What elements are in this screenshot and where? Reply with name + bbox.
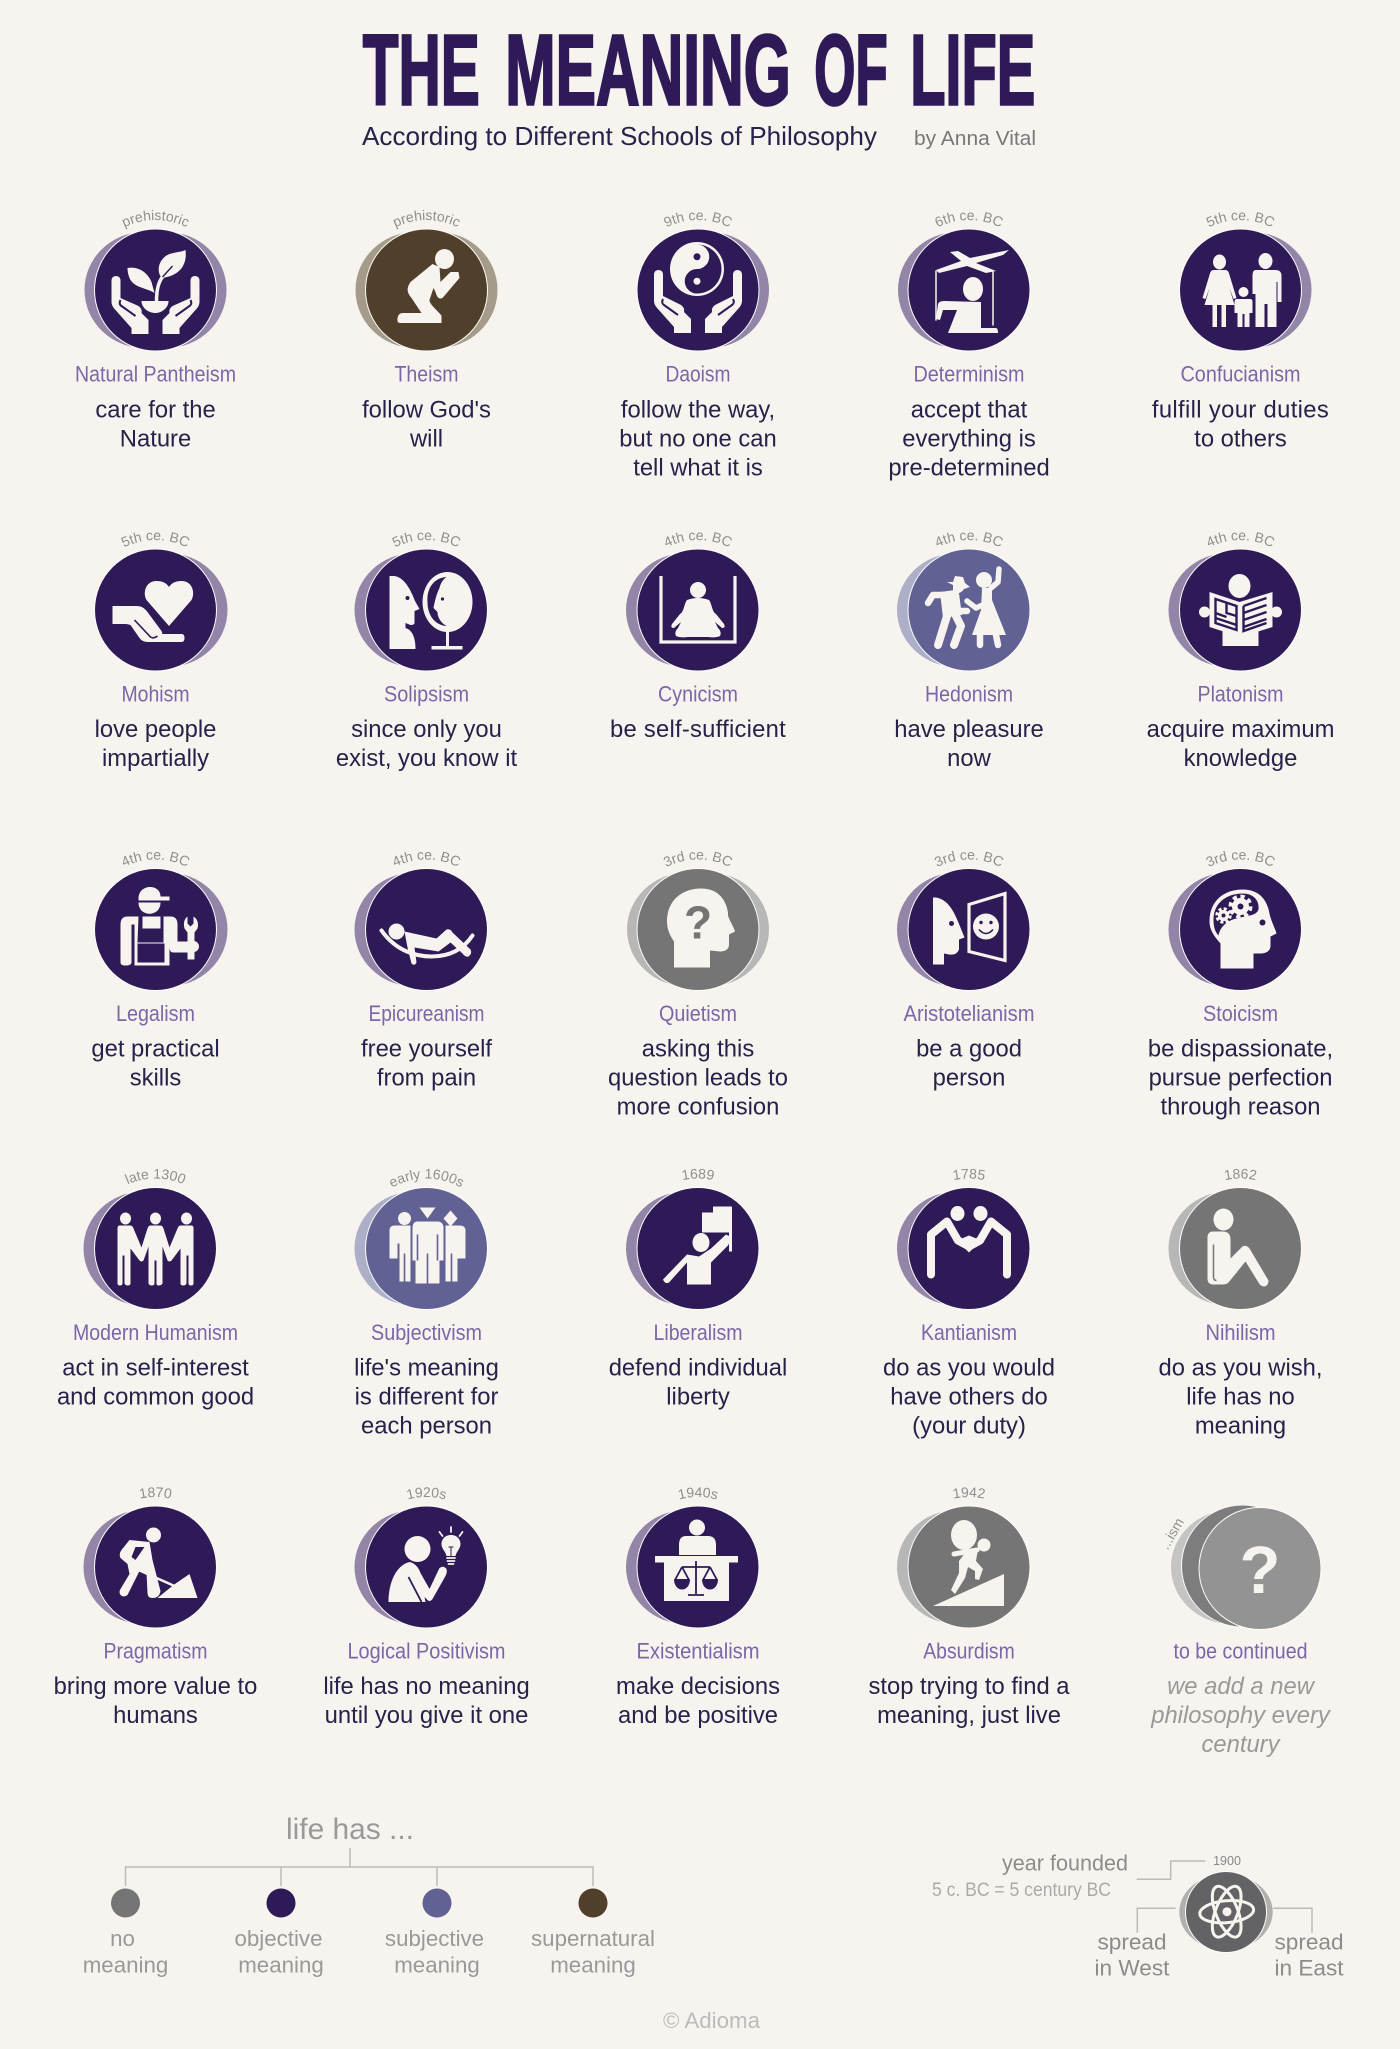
panel: Legalism xyxy=(91,852,228,1092)
title: THE xyxy=(363,14,480,126)
panel: Natural Pantheism xyxy=(75,210,236,452)
byline: by Anna Vital xyxy=(914,128,1036,150)
meaning: make decisions xyxy=(616,1673,780,1700)
legend item: no meaning: no xyxy=(110,1926,135,1951)
name: Theism xyxy=(394,362,458,387)
icon: person digging xyxy=(84,1506,217,1628)
icon: question mark stacked circles: ? xyxy=(1240,1533,1280,1608)
meaning: accept that xyxy=(911,396,1028,424)
legend item: supernatural meaning: supernatural xyxy=(531,1926,655,1951)
meaning: be a good xyxy=(916,1036,1022,1062)
meaning: have others do xyxy=(890,1384,1048,1410)
key connectors xyxy=(1137,1861,1312,1933)
panel: Quietism xyxy=(608,850,788,1120)
meaning: century xyxy=(1201,1731,1282,1758)
era: 4th ce. BC: 4th ce. BC xyxy=(936,532,1003,546)
icon: puppet on strings xyxy=(898,228,1030,352)
meaning: get practical xyxy=(91,1036,220,1062)
key: spread in East: in East xyxy=(1274,1955,1344,1980)
icon: person in hammock xyxy=(354,868,488,991)
name: Cynicism xyxy=(658,682,738,707)
name: Kantianism xyxy=(921,1320,1017,1345)
meaning: bring more value to xyxy=(54,1673,257,1700)
panel: Solipsism xyxy=(336,532,517,772)
era: 1940s: 1940s xyxy=(678,1487,718,1500)
meaning: be dispassionate, xyxy=(1148,1036,1333,1062)
meaning: meaning xyxy=(1195,1412,1286,1440)
meaning: care for the xyxy=(95,396,216,424)
key: year sample: 1900 xyxy=(1213,1854,1241,1868)
icon: hands holding yin yang xyxy=(636,228,769,352)
key: year founded: year founded xyxy=(1002,1851,1128,1876)
panel: Logical Positivism xyxy=(323,1487,530,1729)
legend item: objective meaning xyxy=(234,1888,324,1978)
era: late 1300: late 1300 xyxy=(124,1169,186,1184)
legend tree connector xyxy=(126,1848,593,1886)
meaning: but no one can xyxy=(619,426,777,452)
meaning: love people xyxy=(95,716,216,743)
meaning: pursue perfection xyxy=(1149,1064,1332,1092)
title: OF xyxy=(814,14,888,126)
name: Daoism xyxy=(666,362,730,387)
panel: Mohism xyxy=(94,532,228,772)
icon: head with question mark xyxy=(627,868,769,991)
meaning: now xyxy=(947,745,992,772)
meaning: do as you wish, xyxy=(1158,1354,1323,1382)
era: 6th ce. BC: 6th ce. BC xyxy=(936,212,1003,226)
icon: three people holding hands xyxy=(84,1187,217,1310)
meaning: be self-sufficient xyxy=(610,716,786,743)
era: prehistoric: prehistoric xyxy=(393,210,460,230)
meaning: have pleasure xyxy=(894,716,1044,743)
name: Epicureanism xyxy=(368,1001,484,1026)
era: 5th ce. BC: 5th ce. BC xyxy=(392,532,460,546)
legend item: objective meaning: meaning xyxy=(238,1952,324,1978)
icon: judge at desk with scales xyxy=(626,1506,760,1628)
meaning: free yourself xyxy=(361,1036,492,1062)
era: 3rd ce. BC: 3rd ce. BC xyxy=(664,850,732,866)
panel: Determinism xyxy=(888,212,1050,482)
panel: Daoism xyxy=(619,212,777,482)
legend item: supernatural meaning xyxy=(531,1888,655,1978)
panel: Hedonism xyxy=(894,532,1044,772)
icon: question mark stacked circles xyxy=(1171,1505,1322,1630)
icon: kneeling prayer xyxy=(356,228,498,352)
panel: Modern Humanism xyxy=(57,1169,254,1410)
meaning: we add a new xyxy=(1167,1673,1316,1700)
name: Pragmatism xyxy=(104,1639,208,1664)
name: Quietism xyxy=(659,1001,737,1026)
panel: Theism xyxy=(356,210,498,452)
panel: Subjectivism xyxy=(354,1168,499,1440)
era: 1785: 1785 xyxy=(954,1168,985,1180)
panel: Platonism xyxy=(1147,532,1334,772)
era: early 1600s: early 1600s xyxy=(390,1168,464,1187)
legend item: no meaning: meaning xyxy=(83,1952,168,1978)
meaning: do as you would xyxy=(883,1354,1055,1382)
meaning: fulfill your duties xyxy=(1152,396,1329,424)
meaning: follow the way, xyxy=(621,396,775,424)
meaning: everything is xyxy=(902,426,1036,452)
meaning: stop trying to find a xyxy=(868,1673,1070,1700)
era: 1942: 1942 xyxy=(954,1487,985,1498)
meaning: Nature xyxy=(120,426,191,452)
meaning: since only you xyxy=(351,716,502,743)
subtitle: According to Different Schools of Philosophy xyxy=(362,121,877,151)
panel: Cynicism xyxy=(610,532,786,743)
panel: Absurdism xyxy=(868,1487,1070,1729)
era: ...ism: ...ism xyxy=(1156,1515,1187,1552)
era: 4th ce. BC: 4th ce. BC xyxy=(394,852,460,866)
era: 1920s: 1920s xyxy=(407,1487,446,1500)
title: MEANING xyxy=(505,14,791,126)
meaning: person xyxy=(933,1064,1005,1092)
icon: two figures shaking hands xyxy=(897,1187,1030,1310)
panel: Nihilism xyxy=(1158,1168,1323,1440)
icon: dancing couple xyxy=(897,548,1030,672)
era: 5th ce. BC: 5th ce. BC xyxy=(1206,212,1274,226)
meaning: will xyxy=(409,426,443,452)
meaning: is different for xyxy=(355,1384,498,1410)
name: Legalism xyxy=(116,1001,195,1026)
icon: family xyxy=(1179,228,1312,352)
meaning: question leads to xyxy=(608,1064,788,1092)
meaning: pre-determined xyxy=(888,454,1050,482)
legend item: objective meaning: objective xyxy=(234,1926,323,1951)
icon: seated figure in frame xyxy=(626,548,760,672)
era: 4th ce. BC: 4th ce. BC xyxy=(1208,532,1274,546)
name: Hedonism xyxy=(925,682,1013,707)
meaning: life has no meaning xyxy=(323,1673,530,1700)
icon: head with question mark: ? xyxy=(684,896,712,948)
name: Nihilism xyxy=(1206,1320,1276,1345)
panel: Confucianism xyxy=(1152,212,1329,452)
panel: Aristotelianism xyxy=(897,850,1034,1092)
icon: head with gears xyxy=(1168,868,1302,991)
copyright: © Adioma xyxy=(663,2008,761,2033)
meaning: defend individual xyxy=(609,1354,787,1382)
legend title: life has ... xyxy=(286,1813,414,1846)
name: Stoicism xyxy=(1203,1001,1278,1026)
title: LIFE xyxy=(910,14,1035,126)
era: 9th ce. BC: 9th ce. BC xyxy=(664,212,732,226)
era: 4th ce. BC: 4th ce. BC xyxy=(122,852,190,866)
meaning: (your duty) xyxy=(912,1412,1026,1440)
era: 4th ce. BC: 4th ce. BC xyxy=(665,532,732,546)
meaning: skills xyxy=(130,1064,181,1092)
meaning: act in self-interest xyxy=(62,1354,249,1382)
meaning: knowledge xyxy=(1184,745,1297,772)
meaning: life has no xyxy=(1186,1384,1295,1410)
icon: person raising flag xyxy=(626,1187,760,1310)
icon: atom xyxy=(1179,1871,1273,1953)
name: Confucianism xyxy=(1180,362,1300,387)
name: Logical Positivism xyxy=(348,1639,506,1664)
name: Existentialism xyxy=(636,1639,760,1664)
legend item: subjective meaning: subjective xyxy=(385,1926,484,1951)
meaning: liberty xyxy=(666,1384,730,1410)
icon: face and smiling mirror xyxy=(897,868,1030,991)
name: Subjectivism xyxy=(371,1320,482,1345)
meaning: life's meaning xyxy=(354,1354,499,1382)
key: how to read a circle xyxy=(932,1851,1344,1980)
era: 1689: 1689 xyxy=(682,1168,714,1180)
meaning: from pain xyxy=(377,1064,476,1092)
name: Aristotelianism xyxy=(904,1001,1034,1026)
meaning: until you give it one xyxy=(325,1702,528,1729)
icon: three people with shapes xyxy=(354,1187,488,1310)
legend: life has xyxy=(83,1813,655,1978)
era: 5th ce. BC: 5th ce. BC xyxy=(121,532,190,546)
icon: worker with wrench xyxy=(94,868,228,991)
era: 3rd ce. BC: 3rd ce. BC xyxy=(1206,850,1275,866)
legend item: subjective meaning xyxy=(385,1888,484,1978)
legend item: no meaning xyxy=(83,1888,168,1978)
panel: Pragmatism xyxy=(54,1487,257,1729)
legend item: supernatural meaning: meaning xyxy=(550,1952,636,1978)
panel: to be continued xyxy=(1150,1505,1332,1758)
meaning: more confusion xyxy=(617,1094,779,1120)
meaning: impartially xyxy=(102,745,209,772)
meaning: exist, you know it xyxy=(336,745,517,772)
key: spread in West: spread xyxy=(1097,1929,1167,1954)
name: Liberalism xyxy=(654,1320,742,1345)
meaning: follow God's xyxy=(362,396,491,424)
era: prehistoric: prehistoric xyxy=(122,210,189,230)
meaning: and be positive xyxy=(618,1702,778,1729)
name: Modern Humanism xyxy=(73,1320,238,1345)
era: 1862: 1862 xyxy=(1225,1168,1256,1180)
meaning: through reason xyxy=(1160,1094,1321,1120)
panel: Existentialism xyxy=(616,1487,780,1729)
meaning: meaning, just live xyxy=(877,1702,1061,1729)
era: 3rd ce. BC: 3rd ce. BC xyxy=(934,850,1004,866)
meaning: acquire maximum xyxy=(1147,716,1334,743)
name: to be continued xyxy=(1174,1639,1308,1664)
icon: figure pushing boulder uphill xyxy=(897,1506,1030,1628)
meaning: and common good xyxy=(57,1384,254,1410)
meaning: to others xyxy=(1194,426,1287,452)
icon: thinker with light bulb xyxy=(354,1506,488,1628)
panel: Liberalism xyxy=(609,1168,787,1410)
meaning: asking this xyxy=(642,1036,754,1062)
meaning: humans xyxy=(113,1702,198,1729)
icon: reader with book xyxy=(1168,548,1302,672)
panel: Stoicism xyxy=(1148,850,1333,1120)
icon: face and mirror xyxy=(354,548,488,672)
icon: hand with heart xyxy=(94,548,228,672)
name: Solipsism xyxy=(384,682,469,707)
meaning: tell what it is xyxy=(633,454,763,482)
name: Absurdism xyxy=(923,1639,1015,1664)
panel: Kantianism xyxy=(883,1168,1055,1440)
icon: seated slumped figure xyxy=(1168,1187,1302,1310)
legend item: subjective meaning: meaning xyxy=(394,1952,480,1978)
meaning: each person xyxy=(361,1412,492,1440)
panel: Epicureanism xyxy=(354,852,492,1092)
icon: hands holding plant xyxy=(84,228,226,352)
meaning: philosophy every xyxy=(1150,1702,1332,1729)
era: 1870: 1870 xyxy=(140,1487,172,1498)
key: spread in East: spread xyxy=(1274,1929,1344,1954)
name: Platonism xyxy=(1198,682,1284,707)
name: Natural Pantheism xyxy=(75,362,236,387)
key: century note: 5 c. BC = 5 century BC xyxy=(932,1879,1111,1901)
name: Determinism xyxy=(914,362,1024,387)
key: spread in West: in West xyxy=(1095,1955,1170,1980)
name: Mohism xyxy=(122,682,190,707)
